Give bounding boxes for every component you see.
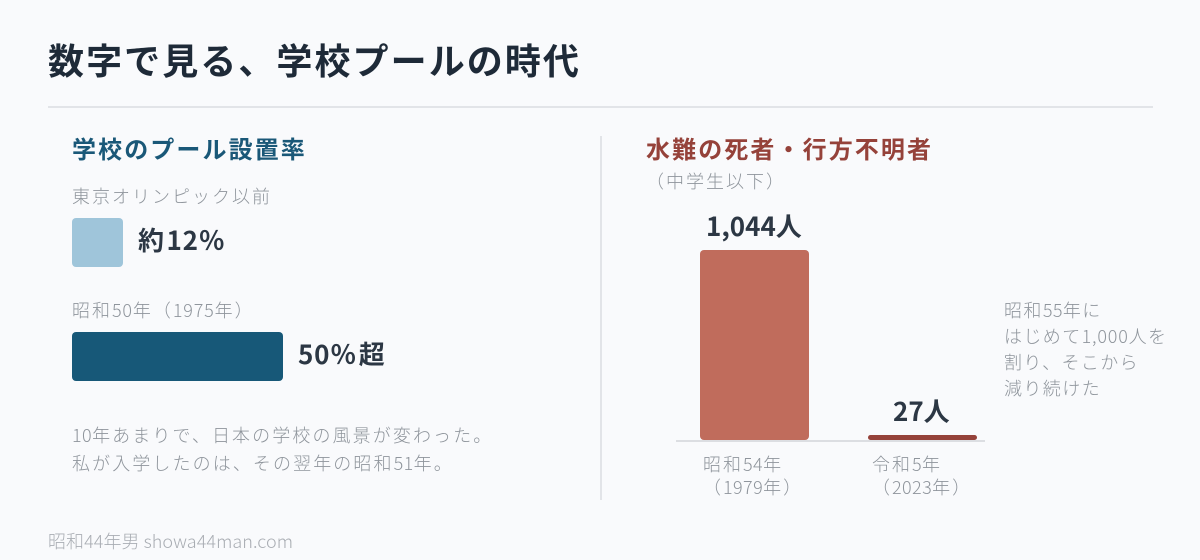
axis label: 1979: 昭和54年 (703, 451, 783, 477)
heading: drowning: 水難の死者・行方不明者 (646, 130, 933, 165)
title: 数字で見る、学校プールの時代 (48, 33, 581, 85)
annotation: 割り、そこから (1004, 349, 1139, 375)
annotation: はじめて1,000人を (1004, 323, 1167, 349)
note: school landscape changed: 10年あまりで、日本の学校の風景が変わった。 (72, 422, 493, 448)
annotation (1004, 297, 1167, 401)
bar: 1979 (700, 250, 809, 440)
axis label: 1979: （1979年） (703, 474, 803, 500)
bar: over 50 percent (72, 332, 283, 381)
footer credit: 昭和44年男 showa44man.com (48, 528, 293, 554)
note: school landscape changed (72, 422, 493, 476)
axis label: 2023: （2023年） (872, 474, 972, 500)
value: 27 people: 27人 (893, 392, 950, 429)
note: school landscape changed: 私が入学したのは、その翌年の昭和51年。 (72, 450, 454, 476)
label: before Tokyo Olympics: 東京オリンピック以前 (72, 183, 272, 209)
axis label: 2023 (872, 451, 972, 500)
heading: pool rate: 学校のプール設置率 (72, 130, 307, 165)
subheading: junior high and under: （中学生以下） (646, 168, 786, 194)
value: 1,044 people: 1,044人 (706, 207, 802, 244)
value: over 50 percent: 50％超 (298, 335, 387, 372)
panel: drowning deaths and missing (646, 130, 1167, 500)
annotation: 減り続けた (1004, 375, 1101, 401)
axis label: 2023: 令和5年 (872, 451, 942, 477)
annotation: 昭和55年に (1004, 297, 1102, 323)
axis label: 1979 (703, 451, 803, 500)
label: Showa 50: 昭和50年（1975年） (72, 297, 255, 323)
panel: school pool installation rate (72, 130, 493, 476)
bar: about 12 percent (72, 218, 123, 267)
value: about 12 percent: 約12％ (138, 221, 227, 258)
bar: 2023 (868, 435, 977, 440)
